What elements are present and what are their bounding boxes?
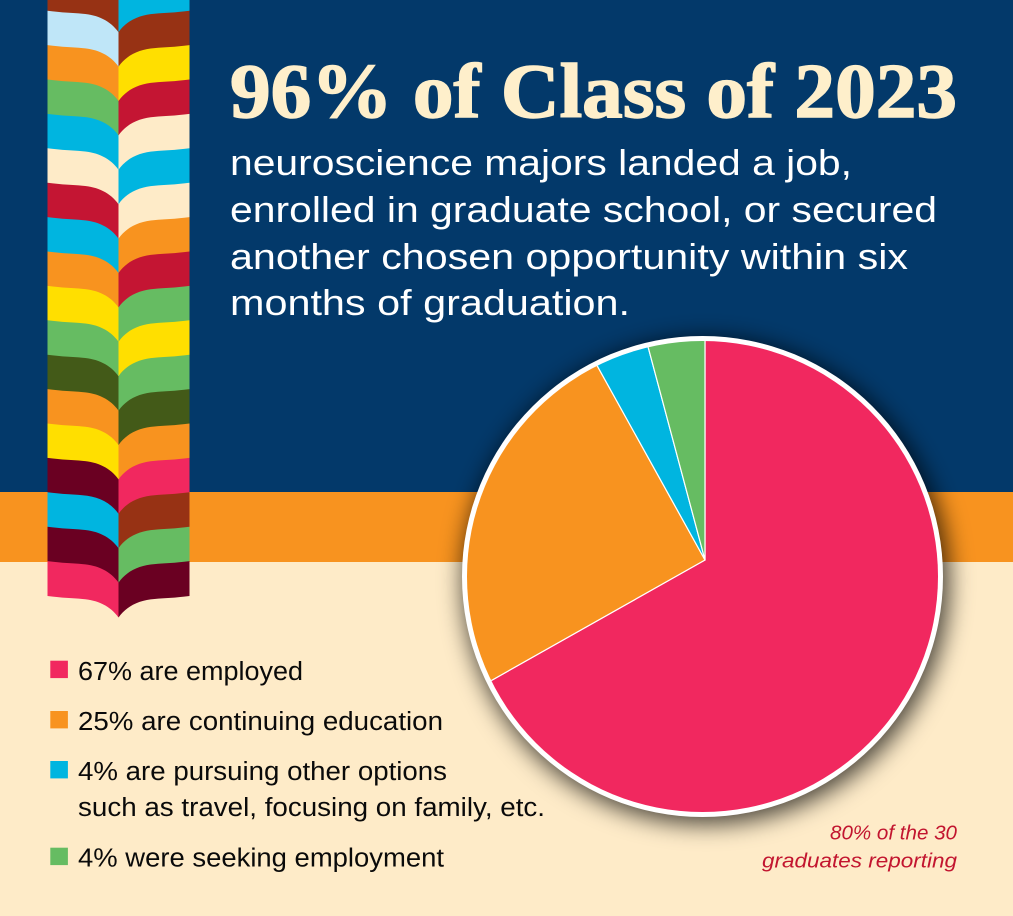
- pie slices: [467, 341, 938, 812]
- intro text: neuroscience majors landed a job,: [230, 142, 852, 183]
- note: reporting rate: graduates reporting: [762, 850, 958, 872]
- note: reporting rate: [762, 822, 958, 872]
- decorative ribbon: [48, 0, 190, 618]
- intro text: months of graduation.: [230, 282, 630, 323]
- note: reporting rate: 80% of the 30: [830, 822, 958, 844]
- background: orange band: [0, 492, 1013, 562]
- slice: other options 4%: [596, 347, 706, 561]
- pie border: [462, 336, 943, 817]
- legend item: employed: 67% are employed: [78, 658, 303, 686]
- slice: employed 67%: [491, 341, 938, 812]
- legend item: seeking employment: 4% were seeking employment: [78, 844, 444, 872]
- intro text: another chosen opportunity within six: [230, 236, 908, 277]
- intro text: enrolled in graduate school, or secured: [230, 189, 937, 230]
- legend: [50, 658, 545, 872]
- background: navy band: [0, 0, 1013, 492]
- slice: seeking employment 4%: [648, 341, 706, 561]
- legend item: continuing education: 25% are continuing education: [78, 708, 443, 736]
- pie shadow: [463, 338, 949, 824]
- title: 96% of Class of 2023: [230, 48, 957, 134]
- ribbon right column: [118, 0, 190, 618]
- legend item: other options: such as travel, focusing on family, etc.: [78, 794, 545, 822]
- intro text: [230, 142, 937, 323]
- background: cream band: [0, 562, 1013, 916]
- legend item: other options: [50, 758, 545, 822]
- ribbon left column: [48, 0, 118, 618]
- slice: continuing education 25%: [467, 366, 706, 681]
- legend item: other options: 4% are pursuing other options: [78, 758, 447, 786]
- pie chart: [444, 324, 968, 843]
